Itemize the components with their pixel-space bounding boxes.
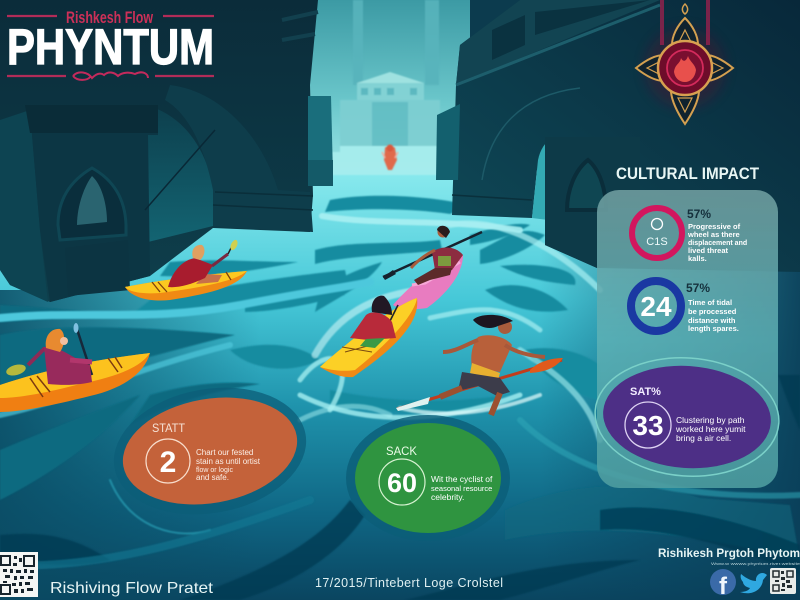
- stat: purple oval: [591, 352, 783, 482]
- ring 1 label: C1S: [646, 236, 668, 248]
- stat: ring 2: [631, 281, 739, 333]
- left arched building: [0, 0, 333, 302]
- ring 2 number: 24: [640, 291, 672, 322]
- QR code: footer left: [0, 552, 38, 597]
- stat 1 text: Progressive of: [688, 222, 741, 231]
- footer project name: Rishiving Flow Pratet: [50, 580, 214, 597]
- purple oval number: 33: [632, 410, 664, 441]
- stat 1 percent: 57%: [687, 207, 711, 221]
- footer small print: Www.w wwww.phyntum.river.website: [711, 561, 800, 566]
- orange oval text: and safe.: [196, 473, 229, 482]
- orange oval number ring: [146, 439, 190, 483]
- stat 2 percent: 57%: [686, 281, 710, 295]
- footer organisation name: Rishikesh Prgtoh Phytom: [658, 546, 800, 560]
- ring 1 icon: [652, 218, 662, 230]
- distant temple: [328, 0, 452, 175]
- stat 2 text: distance with: [688, 316, 736, 325]
- stat 1 text: kalls.: [688, 254, 707, 263]
- title block: [7, 8, 214, 80]
- river swirls: [0, 216, 800, 566]
- kayaker: pink kayak: [383, 226, 482, 309]
- stat 1 text: displacement and: [688, 240, 747, 247]
- right arched building: [436, 0, 800, 272]
- icon: facebook: f: [719, 573, 728, 600]
- green oval number ring: [379, 459, 425, 505]
- green oval number: 60: [387, 468, 417, 498]
- purple oval text: worked here yumit: [675, 424, 746, 434]
- green oval ring: [346, 415, 510, 541]
- stat 1 text: wheel as there: [687, 230, 740, 239]
- ring 1: [632, 208, 682, 258]
- river water patterns: [0, 196, 800, 600]
- orange oval ring: [104, 373, 316, 529]
- QR code: footer right: [770, 568, 796, 594]
- orange oval: [114, 385, 306, 517]
- stat 2 text: be processed: [688, 307, 737, 316]
- heading: cultural impact: CULTURAL IMPACT: [616, 164, 760, 183]
- title top rules: [7, 16, 214, 76]
- green oval text: celebrity.: [431, 492, 464, 502]
- distant swimmer figure: [382, 144, 398, 170]
- orange oval text: flow or logic: [196, 467, 233, 474]
- purple oval text: bring a air cell.: [676, 433, 731, 443]
- kayaker: yellow kayak: [320, 296, 417, 377]
- panel: cultural impact: [597, 190, 778, 488]
- footer date line: 17/2015/Tintebert Loge Crolstel: [315, 576, 503, 590]
- purple oval ring: [591, 352, 783, 482]
- orange oval text: stain as until ortist: [196, 457, 261, 466]
- green oval text: Wit the cyclist of: [431, 474, 493, 484]
- emblem: [636, 0, 733, 124]
- kayaker: upper left: [125, 239, 247, 300]
- purple oval text: Clustering by path: [676, 415, 745, 425]
- orange oval label: STATT: [152, 421, 186, 435]
- stat 1 text: lived threat: [688, 246, 729, 255]
- green oval: [355, 423, 501, 533]
- standing paddler: [396, 315, 563, 415]
- green oval text: seasonal resource: [431, 484, 492, 493]
- title main word: PHYNTUM: [7, 19, 214, 75]
- icon: twitter: [740, 573, 767, 593]
- stat 2 text: length spares.: [688, 324, 739, 333]
- purple oval number ring: [625, 402, 671, 448]
- kayaker: lower left: [0, 323, 150, 412]
- title flourish: [73, 72, 148, 80]
- stat: orange oval: [104, 373, 316, 529]
- orange oval text: Chart our fested: [196, 448, 253, 457]
- purple oval: [600, 360, 774, 474]
- ring 2: [631, 281, 681, 331]
- stat: green oval: [346, 415, 510, 541]
- title kicker: Rishkesh Flow: [66, 8, 154, 27]
- stat 2 text: Time of tidal: [688, 298, 732, 307]
- stat: ring 1: [632, 207, 747, 263]
- purple oval label: SAT%: [630, 386, 661, 398]
- green oval label: SACK: [386, 444, 417, 458]
- icon: facebook: [710, 569, 736, 600]
- orange oval number: 2: [160, 446, 176, 479]
